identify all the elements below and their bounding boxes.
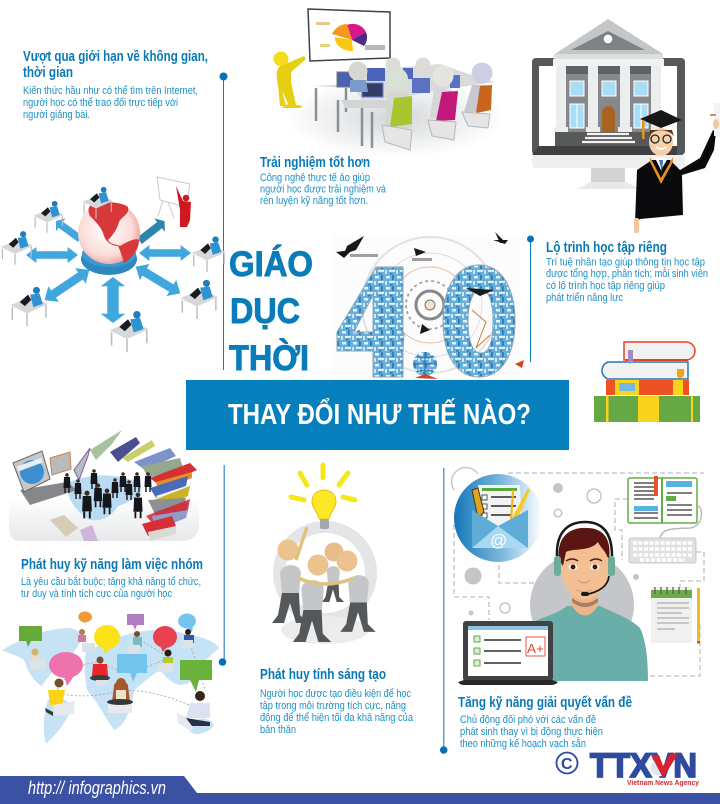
timeline: top right xyxy=(527,236,534,362)
icon: laptop with A+ xyxy=(458,621,558,685)
dashed connectors xyxy=(454,473,704,676)
icon: pediment xyxy=(553,19,664,66)
icon: columns xyxy=(554,66,661,132)
title banner: THAY ĐỔI NHƯ THẾ NÀO? xyxy=(228,397,531,431)
decorative circles xyxy=(452,468,639,616)
text block: Lộ trình học tập riêng xyxy=(546,240,708,304)
text block: Trải nghiệm tốt hơn: Công nghệ thực tế ảo giúp xyxy=(260,172,370,184)
text block: Phát huy kỹ năng làm việc nhóm xyxy=(21,557,203,600)
text block: Trải nghiệm tốt hơn: Trải nghiệm tốt hơn xyxy=(260,155,370,171)
text block: Lộ trình học tập riêng: có lộ trình học tập riêng giúp xyxy=(546,280,665,292)
icon: laptop with A+: A+ xyxy=(527,641,544,656)
digit 0 xyxy=(443,265,515,377)
icon: laptop xyxy=(13,451,77,505)
digit 4 xyxy=(337,267,404,377)
world map xyxy=(2,628,219,744)
icon: people with laptops xyxy=(30,629,210,732)
text block: Vượt qua giới hạn: Kiến thức hầu như có thể tìm trên Internet, xyxy=(23,85,198,97)
text block: Phát huy tính sáng tạo: động để thể hiện tối đa khả năng của xyxy=(260,712,414,724)
text block: Phát huy tính sáng tạo: Người học được tạo điều kiện để học xyxy=(260,688,411,700)
radar rings xyxy=(362,237,498,373)
icon: lab tables and students xyxy=(313,58,495,150)
text block: Tăng kỹ năng giải quyết vấn đề: Chủ động đối phó với các vấn đề xyxy=(460,714,596,726)
text block: Tăng kỹ năng giải quyết vấn đề: theo những kế hoạch vạch sẵn xyxy=(460,737,586,750)
icon: teacher and board xyxy=(157,177,191,227)
text block: Trải nghiệm tốt hơn xyxy=(260,155,387,207)
timeline: bottom right xyxy=(440,468,448,754)
footer bar xyxy=(0,776,720,804)
illustration: online education with books xyxy=(9,430,199,541)
icon: arrows xyxy=(26,214,191,323)
text block: Tăng kỹ năng giải quyết vấn đề xyxy=(458,695,632,750)
illustration: problem solving support agent xyxy=(452,468,704,685)
illustration: 4.0 technology graphic xyxy=(333,232,524,380)
illustration: connected people on world map xyxy=(2,612,219,744)
icon: huddling figures xyxy=(272,527,376,642)
world map xyxy=(68,475,141,521)
icon: light bulb xyxy=(291,465,355,529)
logo: copyright and TTXVN: TTXVN xyxy=(590,747,697,785)
text block: Lộ trình học tập riêng: phát triển năng lực xyxy=(546,292,623,304)
text block: Vượt qua giới hạn xyxy=(23,49,208,121)
logo: copyright and TTXVN: Vietnam News Agency xyxy=(627,778,700,787)
illustration: globe network xyxy=(1,177,226,352)
icon: windows and door xyxy=(570,81,648,142)
heading: GIÁO DỤC THỜI: THỜI xyxy=(229,338,309,378)
text block: Vượt qua giới hạn: thời gian xyxy=(23,65,73,81)
title banner xyxy=(186,380,569,450)
illustration: university in monitor xyxy=(532,19,720,233)
timeline: bottom left xyxy=(219,465,226,666)
illustration: stack of books xyxy=(594,342,700,422)
heading: GIÁO DỤC THỜI: DỤC xyxy=(230,292,300,331)
text block: Phát huy tính sáng tạo: tập trong môi trường tích cực, năng xyxy=(260,700,406,712)
text block: Phát huy tính sáng tạo: bản thân xyxy=(260,724,296,736)
text block: Tăng kỹ năng giải quyết vấn đề: Tăng kỹ năng giải quyết vấn đề xyxy=(458,695,632,711)
icon: grey disc behind agent xyxy=(530,553,634,657)
icon: agent xyxy=(533,522,648,681)
icon: book stack xyxy=(142,458,197,541)
text block: Phát huy kỹ năng làm việc nhóm: Phát huy kỹ năng làm việc nhóm xyxy=(21,557,203,573)
text block: Lộ trình học tập riêng: Lộ trình học tập riêng xyxy=(546,240,667,256)
text block: Trải nghiệm tốt hơn: rèn luyện kỹ năng tốt hơn. xyxy=(260,195,368,207)
icon: speech bubbles xyxy=(19,612,212,692)
icon: envelope circle xyxy=(454,474,542,562)
timeline: top left xyxy=(220,72,228,370)
icon: planes xyxy=(336,232,508,340)
footer bar: http:// infographics.vn xyxy=(28,778,166,798)
icon: notepad and pencil xyxy=(651,587,700,644)
text block: Trải nghiệm tốt hơn: người học được trải nghiệm và xyxy=(260,184,387,196)
decimal point globe xyxy=(413,352,437,376)
text block: Phát huy tính sáng tạo xyxy=(260,667,414,736)
text block: Tăng kỹ năng giải quyết vấn đề: phát sinh thay vì bị động thực hiện xyxy=(460,726,603,738)
heading: GIÁO DỤC THỜI: GIÁO xyxy=(229,244,313,284)
icon: graduates xyxy=(64,469,152,518)
illustration: team with light bulb xyxy=(272,465,376,644)
text block: Vượt qua giới hạn: người giảng bài. xyxy=(23,109,90,121)
illustration: computer lab xyxy=(274,9,505,158)
icon: desk users xyxy=(1,187,226,352)
icon: flying books xyxy=(50,430,176,541)
icon: graduate xyxy=(634,103,720,233)
icon: presentation screen xyxy=(308,9,390,61)
text block: Vượt qua giới hạn: người học có thể trao đổi trực tiếp với xyxy=(23,97,178,109)
logo: copyright and TTXVN: C xyxy=(561,756,573,773)
icon: open book xyxy=(628,476,697,523)
icon: envelope circle: @ xyxy=(490,531,507,550)
text block: Vượt qua giới hạn: Vượt qua giới hạn về không gian, xyxy=(23,49,208,65)
text block: Phát huy tính sáng tạo: Phát huy tính sáng tạo xyxy=(260,667,386,683)
heading: GIÁO DỤC THỜI xyxy=(229,244,313,378)
icon: yellow presenter xyxy=(274,52,306,108)
text block: Phát huy kỹ năng làm việc nhóm: Là yêu cầu bắt buộc; tăng khả năng tổ chức, xyxy=(21,575,201,588)
text block: Phát huy kỹ năng làm việc nhóm: tư duy và tính tích cực của người học xyxy=(21,588,172,600)
icon: keyboard and cable xyxy=(629,506,702,563)
